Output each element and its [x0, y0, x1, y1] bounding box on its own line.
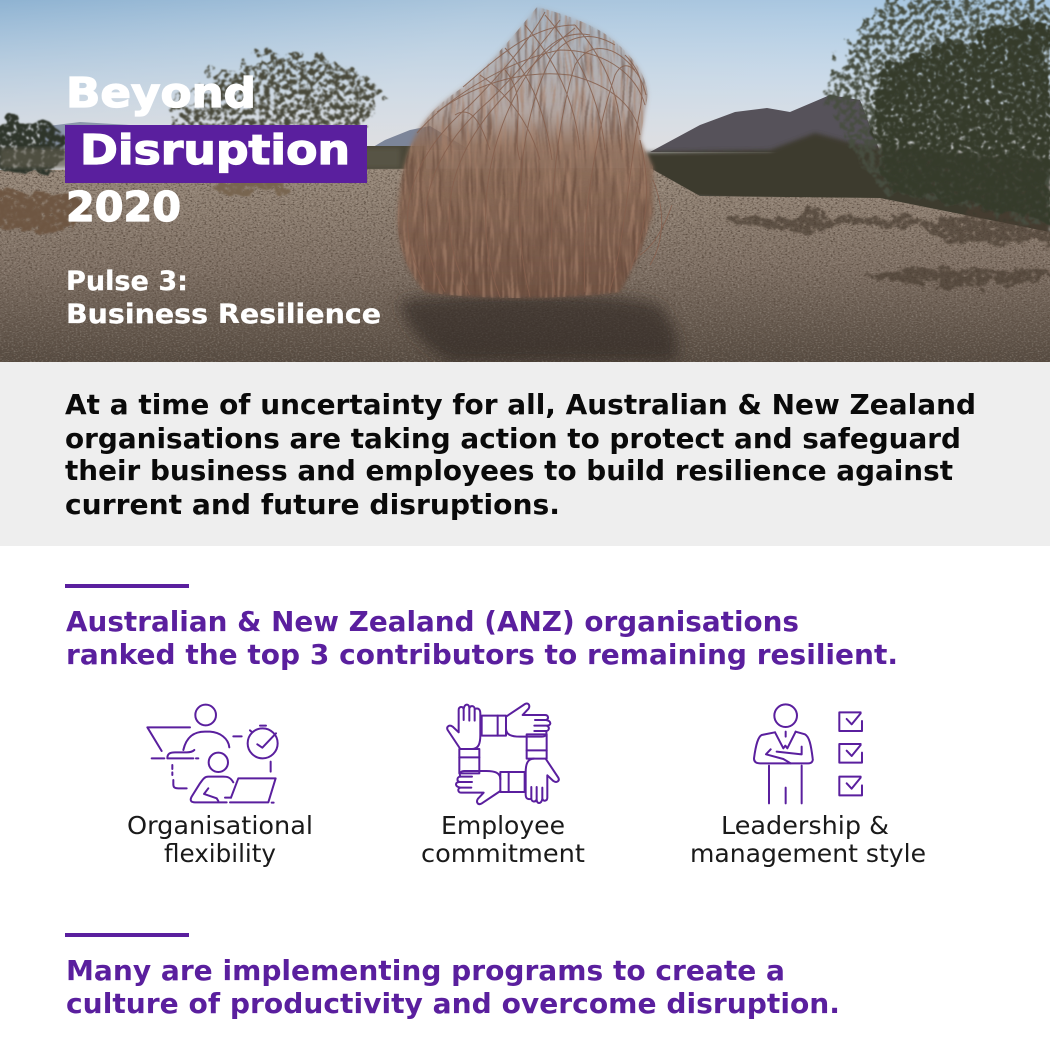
- label: Leadership and management style: [690, 811, 926, 868]
- subtitle: Pulse 3: Pulse 3:: [66, 266, 188, 297]
- section heading 1: Australian & New Zealand (ANZ) organisations: [66, 606, 799, 638]
- intro statement: At a time of uncertainty for all, Australian & New Zealand: [65, 389, 976, 421]
- tumbleweed shadow: [400, 293, 678, 362]
- section rule 2: [65, 933, 189, 937]
- tumbleweed: [390, 0, 672, 300]
- tumbleweed mass: [398, 7, 653, 298]
- left background bush: [165, 55, 385, 136]
- ground debris patches: [730, 212, 1050, 284]
- subtitle: Business Resilience: Business Resilience: [66, 299, 381, 330]
- intro band background: [0, 362, 1050, 546]
- title highlight box: [65, 125, 367, 183]
- label: Employee commitment: commitment: [421, 839, 585, 868]
- label: Organisational flexibility: Organisational: [127, 811, 313, 840]
- horizon scrub: [367, 132, 1050, 232]
- sky: [0, 0, 1050, 190]
- title: Disruption: Disruption: [80, 126, 350, 174]
- title: Beyond: Beyond: [66, 69, 256, 117]
- right bush: [822, 0, 1050, 225]
- label: Organisational flexibility: flexibility: [164, 839, 276, 868]
- distant mountains: [40, 95, 880, 152]
- label: Organisational flexibility: [127, 811, 313, 868]
- section heading 2: Many are implementing programs to create a: [66, 955, 785, 987]
- tumbleweed strands: [408, 12, 672, 297]
- left shrubs: [0, 120, 400, 236]
- label: Employee commitment: Employee: [441, 811, 565, 840]
- title: 2020: 2020: [66, 183, 181, 231]
- section heading 1: ranked the top 3 contributors to remaining resilient.: [66, 639, 898, 671]
- tumbleweed dark fibres: [398, 7, 648, 297]
- title block: [65, 69, 381, 330]
- icon: four interlocked hands: [447, 704, 559, 804]
- intro statement: [65, 389, 976, 521]
- intro statement: their business and employees to build resilience against: [65, 455, 953, 487]
- intro statement: current and future disruptions.: [65, 489, 560, 521]
- label: Leadership and management style: Leadership &: [721, 811, 889, 840]
- intro statement: organisations are taking action to protect and safeguard: [65, 423, 961, 455]
- hero photo: desert with tumbleweed: [0, 0, 1050, 362]
- icon: people working flexibly with clock: [147, 705, 278, 803]
- desert ground: [0, 168, 1050, 362]
- section heading 1: [66, 606, 898, 671]
- label: Employee commitment: [421, 811, 585, 868]
- icon: leader with checklist: [754, 704, 862, 803]
- section rule 1: [65, 584, 189, 588]
- section heading 2: [66, 955, 840, 1020]
- label: Leadership and management style: management style: [690, 839, 926, 868]
- tumbleweed light fibres: [390, 0, 660, 300]
- section heading 2: culture of productivity and overcome disruption.: [66, 988, 840, 1020]
